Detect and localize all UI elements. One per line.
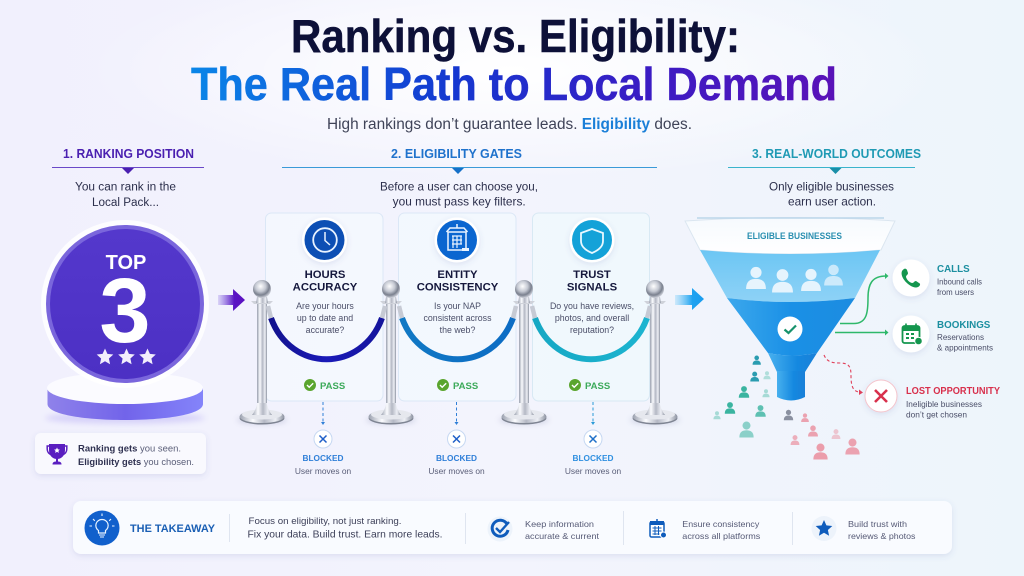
- text: callout: [78, 444, 194, 467]
- status: pass: [437, 379, 478, 392]
- icon: clock: [302, 218, 347, 262]
- icon: trophy: [47, 444, 67, 464]
- stanchion: post 2: [366, 280, 416, 424]
- icon: phone: [902, 269, 920, 287]
- funnel: [685, 218, 895, 400]
- panel: real-world outcomes: [685, 147, 1000, 460]
- text: gates intro: [380, 180, 538, 208]
- card: entity consistency: [398, 213, 516, 401]
- text: outcomes intro: Only eligible businesses: [769, 180, 894, 194]
- status: pass: [304, 379, 345, 392]
- text: hours question: accurate?: [306, 325, 344, 335]
- text: bookings detail: [937, 333, 993, 352]
- text: calls detail: [937, 278, 982, 297]
- text: trust question: photos, and overall: [555, 313, 629, 323]
- rope: trust: [532, 306, 650, 359]
- text: outcomes intro: earn user action.: [788, 196, 876, 208]
- text: lost detail: [906, 400, 982, 420]
- status: pass: [569, 379, 610, 392]
- text: build trust: [848, 519, 916, 541]
- badge: top 3: 3: [99, 260, 151, 362]
- heading: entity consistency: [417, 269, 499, 294]
- arrowhead: calls: [885, 273, 888, 279]
- text: trust question: [550, 301, 634, 335]
- heading: trust signals: [567, 269, 618, 294]
- icon: shield: [570, 218, 614, 262]
- people: filtered users: [713, 356, 860, 460]
- status: pass: PASS: [453, 381, 478, 392]
- blocked: hours: User moves on: [295, 466, 351, 476]
- text: ensure consistency: Ensure consistency: [682, 519, 760, 529]
- text: keep accurate: accurate & current: [525, 531, 600, 541]
- panel: the takeaway: [73, 501, 952, 554]
- arrow: to outcomes: [675, 288, 704, 310]
- stanchion: post 1: [237, 280, 287, 424]
- badge: top 3: [41, 220, 209, 388]
- text: keep accurate: Keep information: [525, 519, 594, 529]
- text: hours question: up to date and: [297, 313, 353, 323]
- icon: check: [778, 316, 802, 342]
- text: rank intro: Local Pack...: [92, 197, 159, 209]
- heading: eligibility gates: 2. ELIGIBILITY GATES: [391, 147, 522, 161]
- text: entity question: consistent across: [424, 313, 492, 323]
- text: takeaway message: [248, 516, 442, 540]
- text: hours question: [296, 301, 354, 335]
- subtitle: High rankings don’t guarantee leads. Eligibility does.: [327, 116, 692, 133]
- stanchion: post 4: [630, 280, 680, 424]
- icon: light bulb: [84, 510, 120, 546]
- icon: calendar: [650, 519, 666, 538]
- badge: top 3: TOP: [106, 252, 146, 274]
- heading: ranking position: 1. RANKING POSITION: [63, 147, 194, 161]
- icon: star: [816, 520, 832, 536]
- text: rank intro: [75, 182, 176, 209]
- text: entity question: [424, 301, 492, 335]
- text: gates intro: Before a user can choose you,: [380, 180, 538, 194]
- blocked: trust: BLOCKED: [572, 453, 614, 463]
- text: bookings detail: & appointments: [937, 344, 993, 352]
- card: hours accuracy: [266, 213, 383, 401]
- rope: hours: [268, 306, 385, 359]
- tip: keep accurate: [488, 516, 600, 542]
- blocked: entity: BLOCKED: [436, 453, 477, 463]
- panel: ranking position: [35, 147, 209, 474]
- text: rank intro: You can rank in the: [75, 182, 176, 194]
- stanchion: post 3: [499, 280, 549, 424]
- icon: check dial: [492, 520, 509, 536]
- icon: building: [434, 218, 480, 262]
- text: hours question: Are your hours: [296, 301, 354, 311]
- blocked: trust: [565, 402, 621, 476]
- tip: build trust: [812, 516, 916, 541]
- heading: hours accuracy: [293, 269, 358, 294]
- text: outcomes intro: [769, 180, 894, 208]
- text: callout: Ranking gets you seen.: [78, 444, 181, 454]
- blocked: entity: User moves on: [428, 466, 485, 476]
- title: The Real Path to Local Demand: [191, 58, 837, 110]
- heading: trust signals: SIGNALS: [567, 282, 618, 294]
- outcome: bookings: [892, 316, 993, 352]
- heading: real-world outcomes: 3. REAL-WORLD OUTCOMES: [752, 147, 921, 161]
- text: ensure consistency: across all platforms: [682, 531, 760, 541]
- text: calls detail: from users: [937, 288, 974, 297]
- text: build trust: Build trust with: [848, 519, 907, 529]
- platform: [45, 372, 205, 424]
- callout: ranking vs eligibility: [35, 433, 206, 474]
- label: eligible businesses: ELIGIBLE BUSINESSES: [747, 231, 842, 241]
- card: trust signals: [532, 213, 650, 401]
- outcome: calls: [892, 260, 982, 297]
- text: takeaway message: Focus on eligibility, not just ranking.: [248, 516, 402, 526]
- text: entity question: the web?: [440, 325, 475, 335]
- text: callout: Eligibility gets you chosen.: [78, 457, 194, 467]
- text: keep accurate: [525, 519, 600, 541]
- blocked: hours: BLOCKED: [302, 453, 344, 463]
- arrow: to lost opportunity: [824, 355, 863, 395]
- label: bookings: BOOKINGS: [937, 320, 991, 331]
- text: entity question: Is your NAP: [434, 301, 481, 311]
- icons: people in funnel: [746, 265, 843, 292]
- text: trust question: reputation?: [570, 325, 614, 335]
- outcome: lost opportunity: [865, 380, 1000, 420]
- heading: the takeaway: THE TAKEAWAY: [130, 523, 216, 535]
- text: ensure consistency: [682, 519, 760, 541]
- heading: entity consistency: CONSISTENCY: [417, 282, 499, 294]
- text: build trust: reviews & photos: [848, 531, 916, 541]
- label: calls: CALLS: [937, 264, 970, 275]
- text: lost detail: don’t get chosen: [906, 410, 967, 420]
- panel: eligibility gates: [237, 147, 680, 476]
- text: gates intro: you must pass key filters.: [393, 196, 526, 208]
- status: pass: PASS: [585, 381, 610, 392]
- arrowhead: bookings: [885, 330, 888, 336]
- title: [191, 10, 837, 110]
- text: calls detail: Inbound calls: [937, 278, 982, 286]
- text: trust question: Do you have reviews,: [550, 301, 634, 311]
- arrow: to calls: [840, 276, 886, 324]
- arrow: to bookings: [835, 332, 886, 334]
- blocked: entity: [428, 402, 485, 476]
- text: takeaway message: Fix your data. Build trust. Earn more leads.: [248, 530, 442, 540]
- arrow: to gates: [218, 289, 245, 311]
- blocked: hours: [295, 402, 351, 476]
- text: lost detail: Ineligible businesses: [906, 400, 982, 409]
- icons: three stars: [97, 348, 156, 364]
- status: pass: PASS: [320, 381, 345, 392]
- label: lost opportunity: LOST OPPORTUNITY: [906, 386, 1000, 397]
- text: bookings detail: Reservations: [937, 333, 984, 342]
- heading: hours accuracy: ACCURACY: [293, 282, 358, 294]
- heading: entity consistency: ENTITY: [437, 269, 478, 281]
- icon: red x: [875, 390, 887, 402]
- rope: entity: [399, 306, 516, 359]
- tip: ensure consistency: [650, 519, 760, 541]
- icon: calendar: [902, 324, 922, 345]
- heading: trust signals: TRUST: [573, 269, 611, 281]
- heading: hours accuracy: HOURS: [305, 269, 346, 281]
- blocked: trust: User moves on: [565, 466, 621, 476]
- title: Ranking vs. Eligibility:: [291, 10, 740, 62]
